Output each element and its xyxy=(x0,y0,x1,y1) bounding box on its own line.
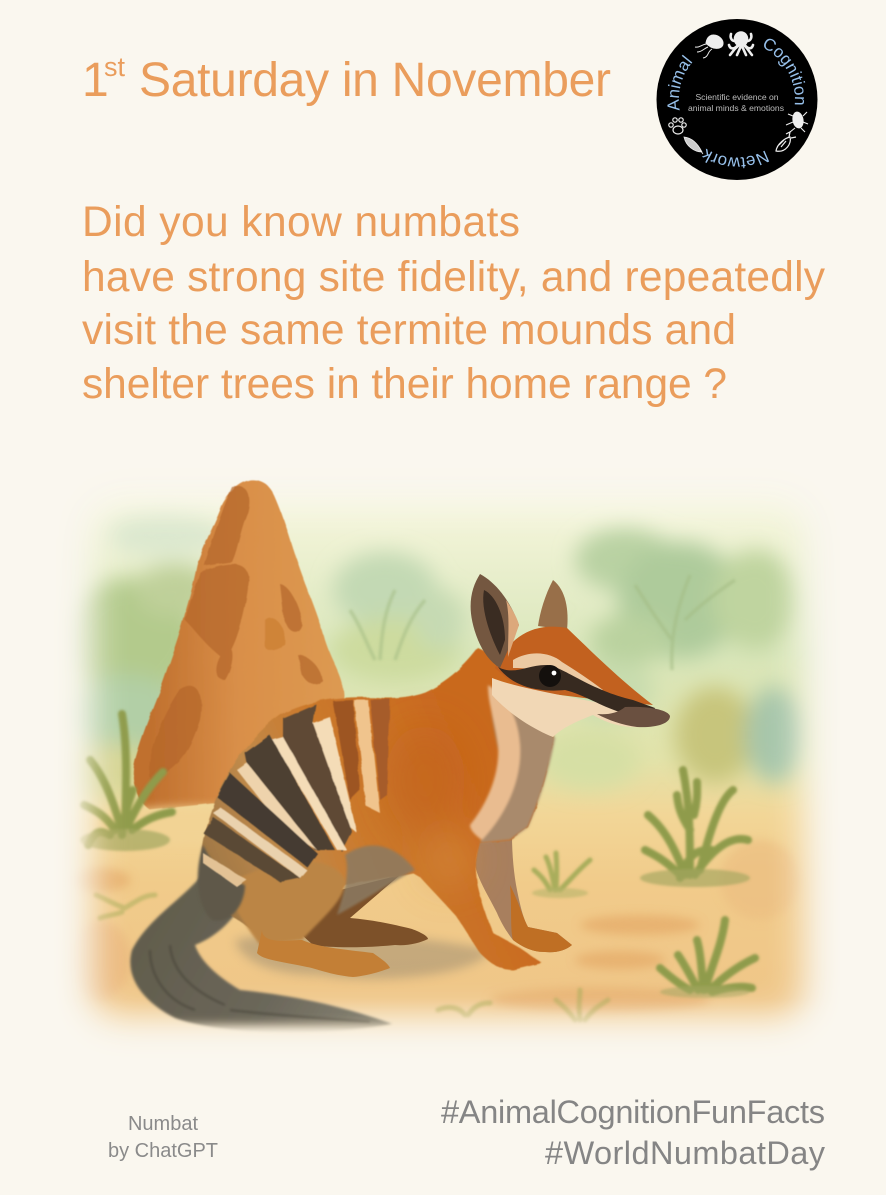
numbat brow xyxy=(513,653,603,690)
icon: beetle xyxy=(786,111,808,132)
main question text: have strong site fidelity, and repeatedly xyxy=(82,254,826,301)
icon: octopus xyxy=(729,32,753,55)
ground shadow xyxy=(235,933,490,979)
date heading: Saturday in November xyxy=(139,54,611,107)
icon: feather xyxy=(684,137,703,154)
numbat chest xyxy=(470,685,555,843)
hashtags: #AnimalCognitionFunFacts xyxy=(441,1094,825,1130)
logo ring text xyxy=(667,38,806,168)
mound base blend xyxy=(100,807,280,843)
main question text: visit the same termite mounds and xyxy=(82,307,736,354)
main question text xyxy=(82,199,826,408)
icon: paw xyxy=(669,118,686,134)
main question text: shelter trees in their home range ? xyxy=(82,361,727,408)
numbat body xyxy=(201,648,560,970)
numbat head xyxy=(471,574,670,737)
logo ring text: Animal xyxy=(667,54,692,110)
numbat fur shading xyxy=(411,794,480,882)
numbat head top xyxy=(495,627,653,705)
date heading: st xyxy=(104,52,126,82)
hashtags xyxy=(441,1094,826,1171)
main question text: Did you know numbats xyxy=(82,199,520,246)
hashtags: #WorldNumbatDay xyxy=(545,1135,826,1171)
numbat left ear xyxy=(471,574,519,668)
logo ring text: Cognition xyxy=(764,38,806,104)
numbat cheek xyxy=(492,678,640,737)
image caption xyxy=(108,1113,218,1162)
numbat eye xyxy=(539,665,561,687)
numbat dark rump xyxy=(198,845,245,921)
icon: fish xyxy=(776,132,796,151)
date heading: 1 xyxy=(82,54,109,107)
background scene xyxy=(68,498,827,1040)
logo tagline: Scientific evidence on xyxy=(695,92,779,102)
numbat far foreleg xyxy=(475,835,572,952)
plant: right bottom tuft xyxy=(660,920,755,998)
plant: right large tuft xyxy=(640,770,750,887)
logo badge: Animal Cognition Network xyxy=(656,19,818,180)
plant: left of mound xyxy=(80,714,172,851)
numbat stripes xyxy=(203,699,390,887)
termite mound xyxy=(133,480,344,810)
image caption: by ChatGPT xyxy=(108,1140,218,1162)
background wash xyxy=(69,500,827,1040)
numbat far hind leg xyxy=(302,875,428,947)
image caption: Numbat xyxy=(128,1113,198,1135)
logo tagline: animal minds & emotions xyxy=(688,103,784,113)
numbat eye stripe xyxy=(498,665,655,712)
plant: faded tufts xyxy=(96,895,608,1020)
illustration: numbat and termite mound xyxy=(68,480,827,1040)
numbat haunch xyxy=(237,864,346,945)
logo ring text: Network xyxy=(702,148,770,168)
icon: jellyfish xyxy=(695,35,723,58)
numbat belly shading xyxy=(337,846,415,915)
logo icons xyxy=(669,32,808,154)
numbat right ear xyxy=(538,580,568,630)
numbat tail xyxy=(130,868,392,1033)
background trees xyxy=(50,513,805,796)
numbat xyxy=(130,574,670,1033)
plant: small tuft near leg xyxy=(532,853,590,898)
plants xyxy=(80,714,755,1020)
ground patches xyxy=(70,840,800,1012)
numbat snout xyxy=(597,707,670,727)
logo tagline xyxy=(688,92,784,113)
numbat hind foot xyxy=(257,930,390,977)
